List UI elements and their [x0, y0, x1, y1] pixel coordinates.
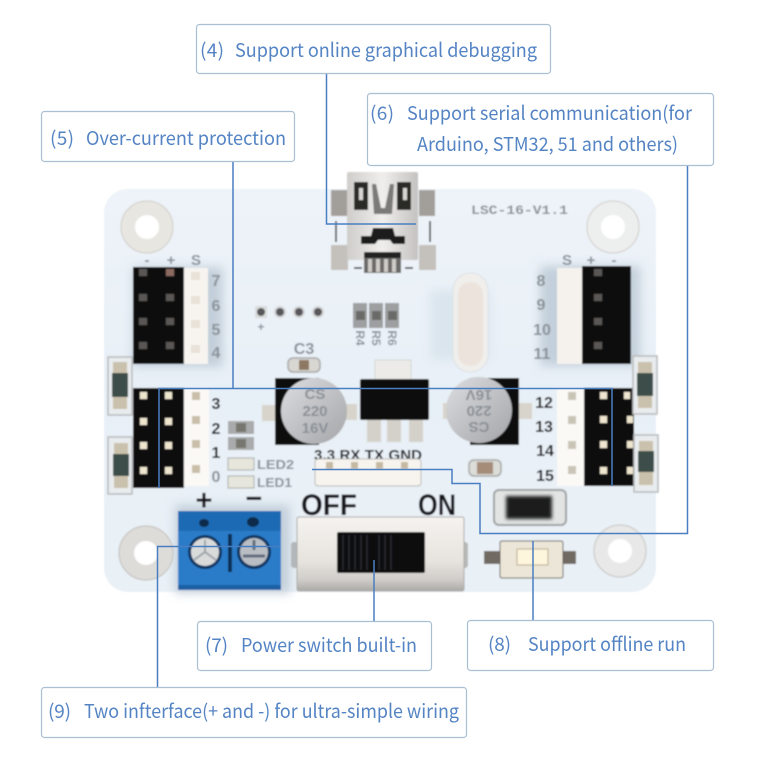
right electrolytic capacitor: 16V: [466, 386, 492, 403]
servo header bottom left: 1: [212, 445, 221, 462]
servo header top left: -: [144, 252, 150, 269]
label 7: power switch: (7): [205, 631, 228, 658]
board version label: LSC-16-V1.1: [471, 204, 568, 218]
right electrolytic capacitor: CS: [469, 418, 489, 435]
servo header top left: 7: [212, 273, 221, 290]
label 8: offline run: (8): [488, 630, 511, 657]
label 6: serial communication: (6): [370, 99, 394, 126]
servo header bottom right: 13: [535, 419, 553, 436]
right electrolytic capacitor: 220: [466, 402, 492, 419]
left electrolytic capacitor: CS: [305, 386, 325, 403]
label 4: online debugging: (4): [200, 36, 224, 63]
LEDs: LED2: [257, 457, 294, 472]
left electrolytic capacitor: 220: [302, 403, 328, 420]
serial pin header: [314, 447, 422, 486]
servo header top left: +: [167, 252, 176, 269]
small capsule part: [469, 460, 501, 476]
servo header top left: 6: [212, 298, 221, 315]
servo header bottom right: 14: [536, 443, 554, 460]
resistors R4 R5 R6: R5: [369, 330, 383, 346]
fuses: [108, 356, 658, 494]
soft shadows around parts: [133, 266, 640, 593]
label 6: serial communication: Arduino, STM32, 51 and others): [417, 130, 678, 157]
label 5: over-current protection: [42, 112, 294, 162]
servo header bottom left: 0: [212, 469, 221, 486]
capacitor C3: [288, 341, 320, 372]
resistors R4 R5 R6: [353, 303, 399, 346]
label 9: two interface wiring: Two infterface(+ and -) for ultra-simple wiring: [84, 697, 459, 724]
reset push button: [484, 541, 576, 578]
servo header bottom left: [133, 388, 221, 488]
left electrolytic capacitor: 16V: [302, 420, 328, 437]
connector line for label 6: [312, 165, 688, 534]
servo header bottom left: 2: [212, 421, 221, 438]
servo header top right: [533, 252, 631, 364]
circuit board: [104, 172, 658, 593]
label 7: power switch: [198, 622, 432, 670]
four-hole header pads: [255, 306, 324, 334]
capacitor C3: C3: [294, 341, 314, 358]
mini USB connector: [331, 172, 436, 273]
crystal: [453, 273, 488, 372]
terminal block: [178, 483, 281, 590]
power slide switch: [291, 489, 468, 591]
label 5: over-current protection: (5): [50, 124, 74, 151]
diode component: [494, 490, 566, 525]
label 8: offline run: Support offline run: [528, 630, 686, 657]
servo header bottom right: [535, 388, 634, 486]
servo header bottom right: 12: [535, 395, 553, 412]
terminal block: +: [196, 485, 212, 517]
servo header top right: 11: [534, 346, 551, 363]
servo header top left: S: [191, 252, 201, 269]
servo header top right: 9: [537, 297, 546, 314]
label 5: over-current protection: Over-current protection: [86, 124, 286, 151]
label 9: two interface wiring: (9): [48, 697, 71, 724]
connector line for label 7: [373, 560, 375, 621]
servo header top right: +: [587, 252, 596, 269]
board plate: [104, 189, 656, 592]
LEDs: [228, 421, 294, 490]
servo header bottom left: 3: [212, 396, 221, 413]
connector line for label 4: [326, 73, 416, 224]
resistors R4 R5 R6: R4: [353, 330, 367, 346]
four-hole header pads: +: [257, 320, 265, 334]
power slide switch: ON: [418, 489, 456, 522]
LEDs: LED1: [257, 475, 292, 490]
mounting holes: [119, 201, 646, 580]
connector line for label 8: [532, 541, 534, 620]
servo header top right: 8: [537, 273, 546, 290]
left electrolytic capacitor: [262, 378, 357, 445]
voltage regulator: [360, 360, 429, 442]
servo header top right: 10: [533, 322, 551, 339]
connector lines for label 5: [159, 162, 612, 488]
servo header top right: S: [562, 252, 572, 269]
label 6: serial communication: [368, 94, 714, 166]
label 4: online debugging: Support online graphical debugging: [235, 36, 537, 63]
terminal block: −: [246, 483, 262, 515]
label 7: power switch: Power switch built-in: [241, 631, 417, 658]
label 4: online debugging: [196, 24, 550, 74]
servo header bottom right: 15: [536, 468, 554, 485]
servo header top right: -: [612, 252, 616, 269]
servo header top left: 5: [212, 322, 221, 339]
servo header top left: [133, 252, 221, 364]
label 9: two interface wiring: [42, 688, 466, 738]
right electrolytic capacitor: [443, 377, 532, 445]
power slide switch: OFF: [301, 489, 357, 522]
connector line for label 9: [158, 546, 279, 687]
resistors R4 R5 R6: R6: [385, 330, 399, 346]
servo header top left: 4: [212, 345, 221, 362]
label 6: serial communication: Support serial communication(for: [407, 99, 693, 126]
label 8: offline run: [468, 620, 714, 670]
serial pin header: 3.3 RX TX GND: [314, 447, 422, 464]
